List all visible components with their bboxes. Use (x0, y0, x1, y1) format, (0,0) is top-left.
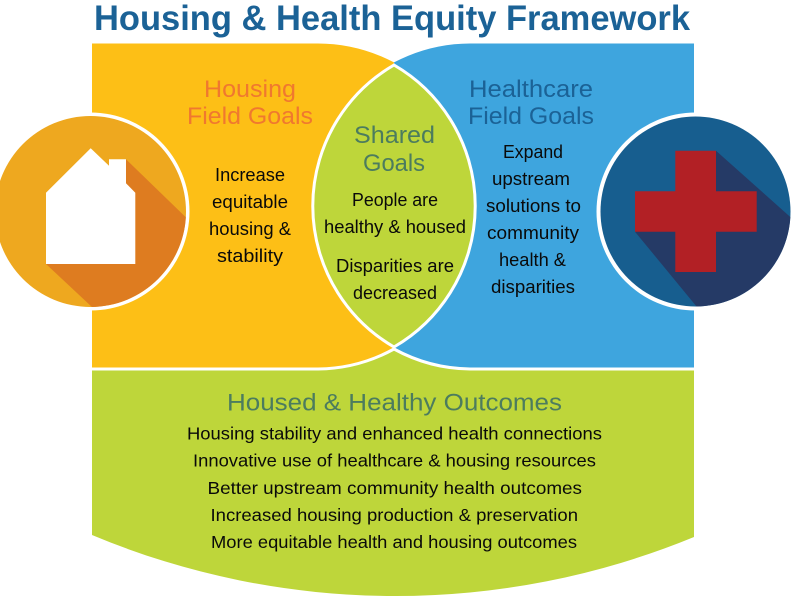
text block: outcomes list: Innovative use of healthcare & housing resources (193, 450, 596, 470)
text block: shared goals: People are (352, 190, 438, 210)
text block: healthcare goals: Expand (503, 142, 563, 162)
text block: outcomes list: Better upstream community health outcomes (208, 478, 582, 498)
text block: healthcare goals: upstream (492, 169, 570, 189)
heading: housing field goals: Housing (204, 76, 296, 103)
heading: outcomes: Housed & Healthy Outcomes (227, 390, 562, 416)
text block: healthcare goals: health & (499, 250, 566, 270)
text block: shared goals (324, 190, 466, 303)
text block: shared goals: healthy & housed (324, 217, 466, 237)
text block: outcomes list: Increased housing production & preservation (210, 505, 578, 525)
panel: housing field goals (92, 44, 394, 370)
text block: outcomes list (187, 424, 602, 552)
heading: shared goals: Goals (363, 150, 425, 177)
icon: house (0, 112, 200, 320)
text block: shared goals: Disparities are (336, 256, 454, 276)
text block: housing goals: stability (217, 246, 283, 266)
heading: healthcare field goals: Field Goals (468, 103, 594, 130)
heading: shared goals: Shared (354, 122, 435, 149)
heading: housing field goals: Field Goals (187, 103, 313, 130)
text block: housing goals: equitable (212, 192, 288, 212)
heading: housing field goals (187, 76, 313, 130)
panel: healthcare field goals (394, 44, 694, 370)
text block: housing goals (209, 165, 291, 266)
text block: healthcare goals: disparities (491, 277, 575, 297)
heading: healthcare field goals: Healthcare (469, 76, 593, 103)
title: Housing & Health Equity Framework (94, 0, 691, 38)
text block: healthcare goals: community (487, 223, 579, 243)
text block: outcomes list: Housing stability and enhanced health connections (187, 424, 602, 444)
text block: healthcare goals (486, 142, 581, 297)
heading: healthcare field goals (468, 76, 594, 130)
icon: medical cross (596, 112, 800, 320)
panel: shared goals (313, 65, 475, 347)
text block: housing goals: housing & (209, 219, 291, 239)
heading: shared goals (354, 122, 435, 177)
text block: housing goals: Increase (215, 165, 285, 185)
text block: healthcare goals: solutions to (486, 196, 581, 216)
text block: outcomes list: More equitable health and housing outcomes (211, 532, 577, 552)
text block: shared goals: decreased (353, 283, 437, 303)
panel: housed and healthy outcomes (92, 340, 694, 596)
